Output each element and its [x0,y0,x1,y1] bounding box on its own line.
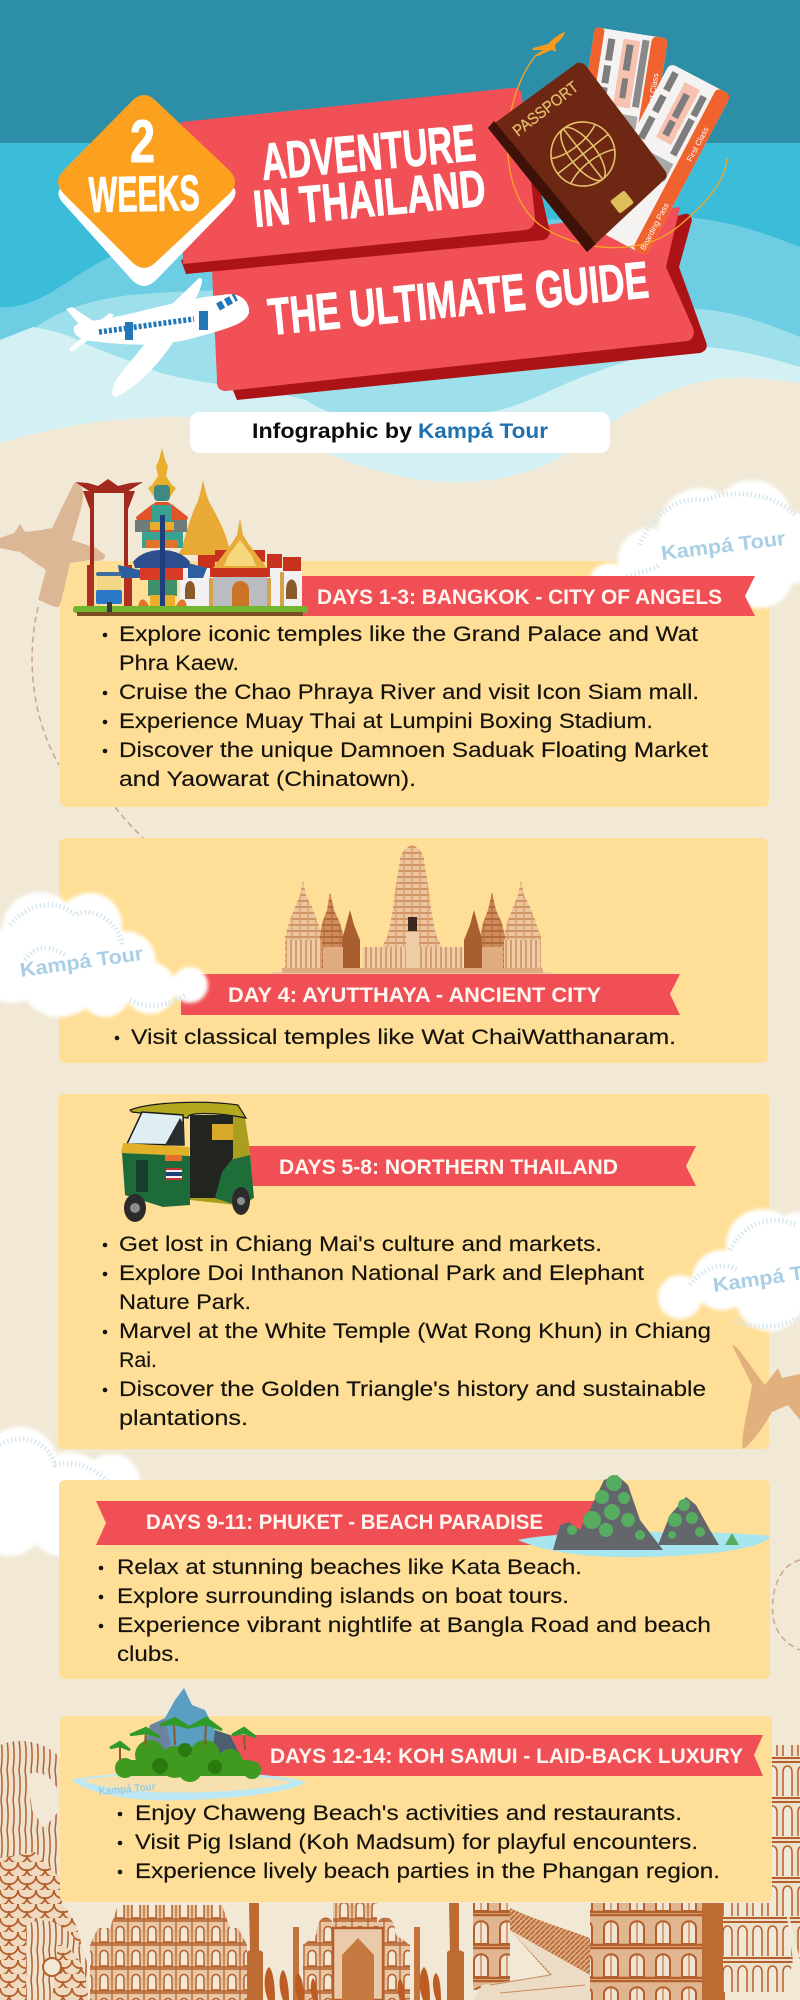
ribbon heading [96,1501,600,1545]
cloud with watermark [588,480,800,610]
globe emblem [538,109,628,199]
red ribbon: adventure in thailand [181,88,550,274]
bullet list: Experience lively beach parties in the Phangan region. [135,1860,720,1883]
roof [130,1102,246,1118]
watermark text: Kampá Tour [660,528,787,565]
golden stupa [178,480,233,555]
cloud left with watermark [0,892,208,1017]
cloud right with watermark [658,1209,800,1331]
icon: boarding pass front [585,63,731,256]
credit text: Infographic by [252,420,412,443]
heading: in thailand: IN THAILAND [251,160,488,239]
roman building [590,1903,725,2000]
ribbon heading [240,1146,696,1186]
windshield [127,1112,184,1145]
bullet list: and Yaowarat (Chinatown). [119,768,416,791]
bullet list: Explore Doi Inthanon National Park and Elephant [119,1262,644,1285]
bullet list: Discover the Golden Triangle's history and sustainable [119,1378,706,1401]
bottom engraving: landmarks [0,1741,800,2000]
bullet list: Phra Kaew. [119,652,239,675]
bullet list: clubs. [117,1643,180,1666]
illustration: bangkok landmarks [73,448,308,616]
illustration: ayutthaya temple [272,845,551,975]
illustration: tropical island [71,1688,306,1800]
number 2: 2 [130,108,155,175]
icon: tan airplane right [732,1345,800,1449]
bullet list: Nature Park. [119,1291,251,1314]
bullet list: Experience vibrant nightlife at Bangla Road and beach [117,1614,711,1637]
giant swing [75,479,143,609]
flight orbit arc [508,55,727,248]
bullet list: Get lost in Chiang Mai's culture and markets. [119,1233,602,1256]
bullet list: Discover the unique Damnoen Saduak Floating Market [119,739,708,762]
bullet list: plantations. [119,1407,248,1430]
badge: 2 weeks [58,95,236,286]
word weeks: WEEKS [88,165,200,223]
label: boarding pass: Boarding Pass [639,201,671,252]
blue tuk-tuk [96,572,122,612]
gallery walls [363,947,463,968]
cypress trees [265,1967,441,2000]
bullet list: Experience Muay Thai at Lumpini Boxing Stadium. [119,710,653,733]
taj mahal [293,1903,420,2000]
side prangs [285,880,323,968]
watermark text: Kampá Tour [19,943,145,982]
panel: days 9-11 phuket [59,1475,770,1679]
bullet list: Explore iconic temples like the Grand Palace and Wat [119,623,698,646]
green front body [122,1153,190,1207]
heading: adventure: ADVENTURE [259,114,478,192]
bullet list [103,1233,711,1430]
icon: boarding pass back [568,27,668,211]
wheels [124,1194,146,1222]
bullet list: Explore surrounding islands on boat tours. [117,1585,569,1608]
leaning tower [723,1745,800,1992]
bullet list [99,1556,711,1666]
right minaret [447,1903,464,2000]
yellow band [121,1143,190,1156]
dashed flight path right [772,1560,800,1650]
island watermark: Kampá Tour [98,1781,157,1798]
heading text: DAYS 1-3: BANGKOK - CITY OF ANGELS [317,585,722,609]
illustration: green tuk-tuk [121,1102,254,1222]
brand name: Kampá Tour [418,420,548,443]
passport label: PASSPORT [510,79,582,140]
panel: days 1-3 bangkok [60,480,800,807]
interior [190,1115,233,1198]
panel: days 5-8 northern thailand [58,1094,769,1449]
ribbon heading [230,1735,763,1776]
heading text: DAYS 12-14: KOH SAMUI - LAID-BACK LUXURY [270,1744,743,1768]
bullet list: Enjoy Chaweng Beach's activities and restaurants. [135,1802,682,1825]
icon: small orange plane [532,32,565,56]
credit pill [190,412,610,453]
heading text: DAYS 9-11: PHUKET - BEACH PARADISE [146,1510,543,1534]
bullet list [118,1802,720,1883]
heading text: DAYS 5-8: NORTHERN THAILAND [279,1155,618,1179]
bullet list: Rai. [119,1349,157,1372]
chip [610,190,634,214]
central prang [378,845,446,955]
cloud lower left [0,1427,140,1556]
panel: days 12-14 koh samui [60,1688,772,1902]
bullet list: Visit classical temples like Wat ChaiWatthanaram. [131,1026,676,1049]
icon: passport [488,63,667,252]
ribbon heading [181,974,680,1015]
left minaret [247,1903,263,2000]
rear body [190,1108,253,1205]
bullet list: Relax at stunning beaches like Kata Beach. [117,1556,582,1579]
dashed flight path left [32,607,143,838]
white temple [180,518,302,606]
bullet list: Cruise the Chao Phraya River and visit Icon Siam mall. [119,681,699,704]
hawa mahal palace [90,1905,247,2000]
icon: tan airplane left [0,483,105,607]
panel: day 4 ayutthaya [59,838,768,1063]
label: first class: First Class [685,126,711,163]
ribbon heading [300,576,755,616]
red ribbon: the ultimate guide [212,207,707,400]
merlion statue [0,1741,88,2000]
heading text: DAY 4: AYUTTHAYA - ANCIENT CITY [228,983,601,1007]
yaksha giant guardian [118,448,207,608]
label: first class: First Class [646,73,660,111]
bullet list [103,623,708,791]
colosseum [473,1903,590,2000]
thai flag [166,1168,182,1180]
bullet list: Marvel at the White Temple (Wat Rong Khun) in Chiang [119,1320,711,1343]
ground strip [73,606,308,616]
illustration: limestone island [518,1475,770,1557]
icon: white airplane [66,278,249,397]
bullet list: Visit Pig Island (Koh Madsum) for playful encounters. [135,1831,698,1854]
